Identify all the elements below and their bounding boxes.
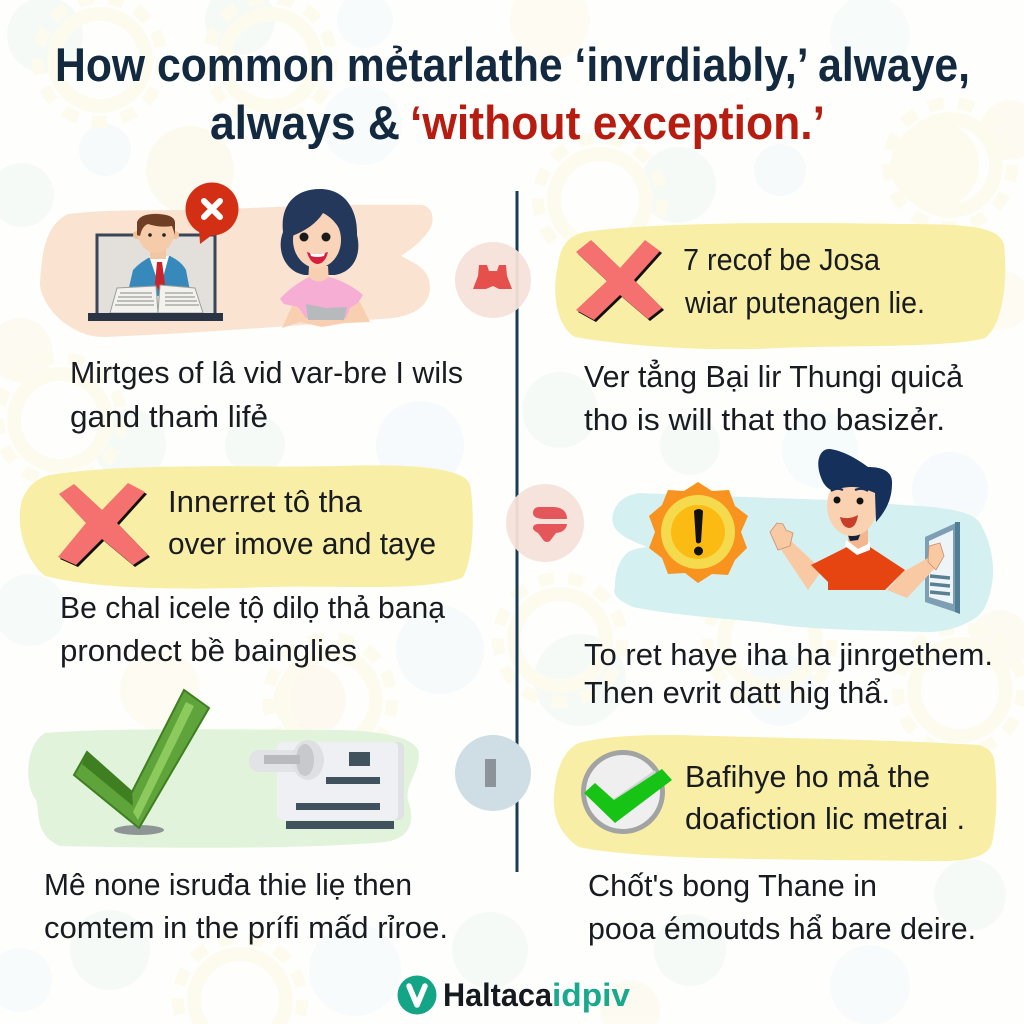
text: callout: wiar putenagen lie.: [684, 285, 925, 320]
text: middle right caption: To ret haye iha ha jinrgethem.: [584, 637, 993, 672]
text: bottom left caption: [44, 867, 448, 945]
text: callout: 7 recof be Josa: [683, 242, 881, 277]
text: middle left caption: Be chal icele tộ dilọ thả banạ: [60, 590, 446, 625]
icon: circle check: [584, 752, 672, 832]
center divider: [516, 191, 518, 872]
title: ‘without exception.’: [410, 96, 825, 149]
logo: [398, 976, 630, 1014]
icon: laptop with presenter and book: [88, 213, 223, 321]
text: middle left caption: [60, 590, 446, 668]
icon: warning sun badge: [649, 482, 748, 583]
text: callout: Bafihye ho mả the: [685, 759, 930, 794]
title: always &: [210, 96, 400, 149]
panel: top right callout: [555, 223, 1005, 349]
text: bottom left caption: Mê none isruđa thie liẹ then: [44, 867, 412, 902]
badge: bottom circle: [455, 735, 531, 811]
icon: red cross: [58, 483, 150, 567]
panel: bottom right callout: [554, 735, 996, 861]
title: [55, 38, 970, 149]
text: bottom left caption: comtem in the prífi mấd rỉroe.: [44, 910, 448, 945]
text: callout: [683, 242, 925, 320]
panel: middle right illustration: [612, 449, 993, 632]
icon: red cross: [576, 240, 664, 322]
text: bottom right caption: [588, 868, 976, 946]
panel: bottom left illustration: [28, 690, 419, 848]
text: top left caption: gand thaṁ lifẻ: [70, 399, 268, 434]
text: callout: doafiction lic metrai .: [685, 801, 965, 836]
text: middle left caption: prondect bề bainglies: [60, 633, 357, 668]
text: top left caption: Mirtges of lâ vid var-bre I wils: [70, 355, 463, 390]
text: callout: over imove and taye: [168, 526, 436, 561]
logo: idpiv: [552, 977, 630, 1013]
badge: middle circle: [506, 484, 584, 562]
text: middle right caption: Then evrit datt hig thẩ.: [584, 675, 890, 710]
icon: red x speech bubble: [186, 182, 238, 244]
text: bottom right caption: pooa émoutds hẩ bare deire.: [588, 911, 976, 946]
text: bottom right caption: Chốt's bong Thane in: [588, 868, 877, 903]
panel: top left illustration: [40, 182, 433, 337]
text: middle right caption: [584, 637, 993, 710]
badge: top circle: [455, 242, 531, 318]
text: top right caption: [584, 358, 964, 437]
icon: green check mark: [74, 690, 209, 835]
icon: id card key: [249, 740, 404, 829]
text: callout: [685, 759, 965, 836]
text: callout: Innerret tô tha: [168, 484, 363, 519]
text: callout: [168, 484, 436, 561]
panel: middle left callout: [20, 465, 473, 589]
icon: cheerful man with document: [770, 449, 960, 614]
text: top left caption: [70, 355, 463, 434]
text: top right caption: Ver tẳng Bại lir Thungi quicả: [584, 358, 964, 394]
logo: Haltaca: [443, 977, 552, 1013]
text: top right caption: tho is will that tho basizẻr.: [584, 402, 945, 437]
icon: woman reading: [280, 189, 370, 328]
